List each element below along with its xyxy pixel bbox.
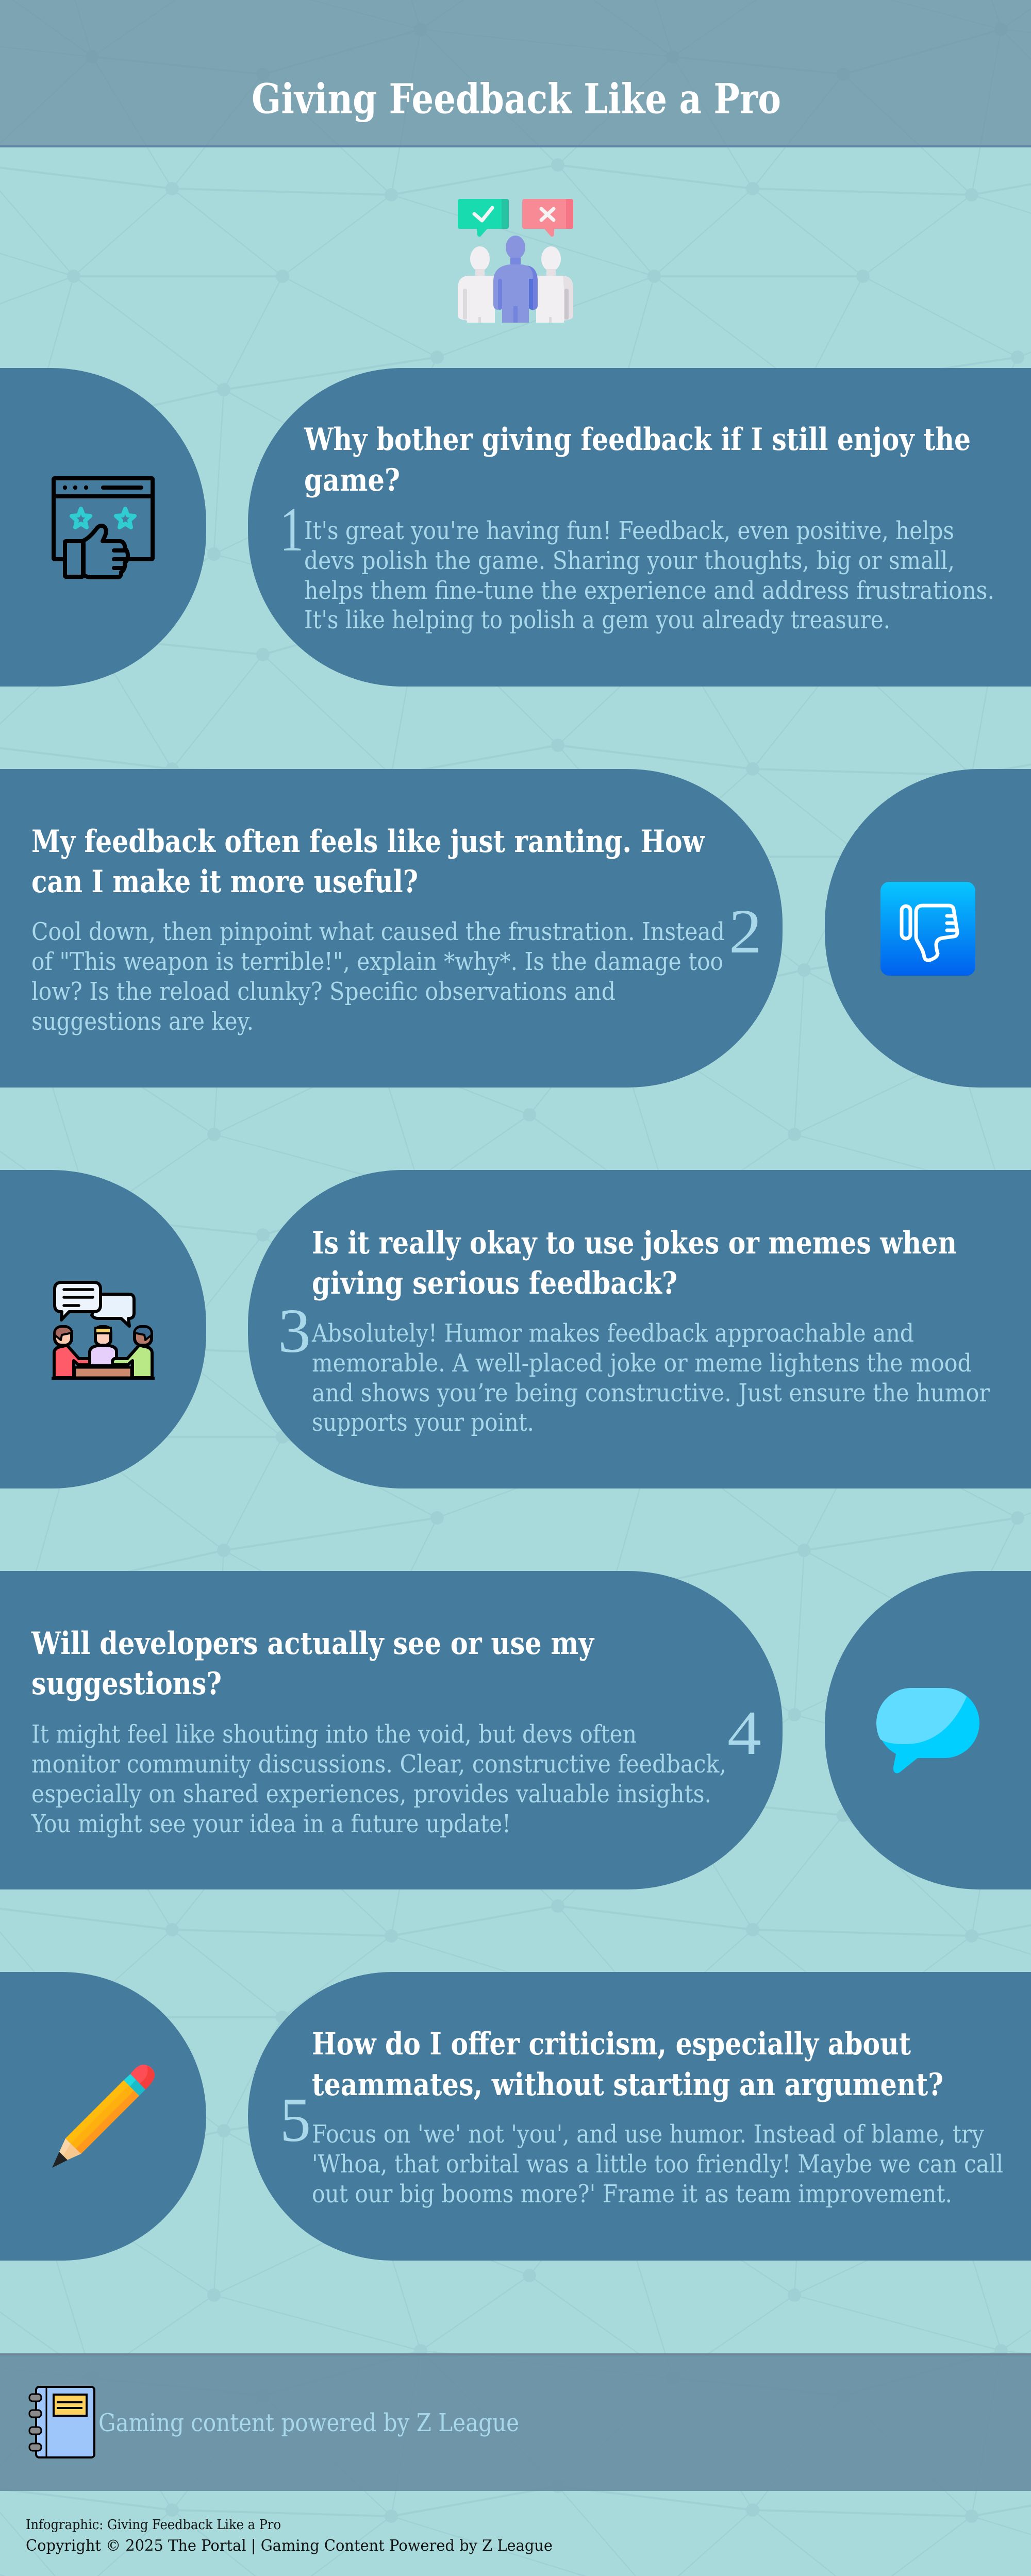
answer pill: question 5 [248,1972,1031,2261]
icon disc: question 5 [0,1972,206,2261]
body text: answer 2 [31,917,725,1036]
footer powered-by text: Gaming content powered by Z League [98,2408,519,2437]
footer band [0,2353,1031,2491]
panel: question 3 [0,1170,1031,1488]
caption: infographic name: Infographic: Giving Feedback Like a Pro [26,2517,281,2533]
heading: question 3: giving serious feedback? [312,1265,677,1301]
number 4: 4 [727,1698,761,1768]
body text: answer 1: It's like helping to polish a gem you already treasure. [304,606,890,634]
body text: answer 3: Absolutely! Humor makes feedback approachable and [311,1319,914,1348]
panel: question 4 [0,1571,1031,1889]
answer pill: question 2 [0,769,783,1088]
body text: answer 5 [312,2120,1003,2209]
heading: question 5 [312,2026,943,2103]
number 1: 1 [280,495,304,564]
icon disc: question 2 [825,769,1031,1088]
heading: question 2: can I make it more useful? [31,864,418,900]
number 3: 3 [278,1296,311,1366]
heading: question 1: game? [304,462,400,498]
body text: answer 4 [31,1720,726,1838]
panel: question 2 [0,769,1031,1088]
icon: spiral notebook [29,2387,94,2457]
panel: question 5 [0,1972,1031,2261]
body text: answer 4: especially on shared experiences, provides valuable insights. [31,1780,711,1809]
heading: question 5: How do I offer criticism, especially about [312,2026,911,2062]
body text: answer 2: low? Is the reload clunky? Specific observations and [31,977,616,1006]
heading: question 4: suggestions? [31,1666,222,1702]
heading: question 2: My feedback often feels like just ranting. How [31,824,705,860]
header band with title [0,0,1031,147]
icon: group of people with approve and reject speech bubbles [458,199,573,323]
body text: answer 5: out our big booms more?' Frame it as team improvement. [312,2180,952,2209]
body text: answer 4: monitor community discussions. Clear, constructive feedback, [31,1750,726,1779]
answer pill: question 4 [0,1571,783,1889]
body text: answer 2: of "This weapon is terrible!", explain *why*. Is the damage too [31,947,723,976]
panel: question 1 [0,368,1031,687]
number 5: 5 [280,2085,311,2155]
heading: question 4 [31,1626,595,1702]
icon: browser window with stars and thumbs up [54,478,153,577]
body text: answer 3: memorable. A well-placed joke or meme lightens the mood [312,1349,972,1378]
copyright line: Copyright © 2025 The Portal | Gaming Content Powered by Z League [26,2537,553,2555]
heading: question 4: Will developers actually see or use my [31,1626,595,1662]
body text: answer 2: suggestions are key. [31,1007,254,1036]
icon: pencil [52,2065,155,2168]
body text: answer 3: supports your point. [312,1408,534,1437]
body text: answer 1 [304,516,994,634]
icon disc: question 1 [0,368,206,687]
body text: answer 4: It might feel like shouting into the void, but devs often [31,1720,637,1749]
icon: thumbs down on blue tile [880,882,975,976]
body text: answer 3 [311,1319,990,1437]
heading: question 3 [312,1225,957,1301]
icon disc: question 4 [825,1571,1031,1889]
answer pill: question 1 [248,368,1031,687]
heading: question 1 [304,422,971,498]
heading: question 2 [31,824,705,900]
title: Giving Feedback Like a Pro [252,74,781,123]
icon: cyan speech bubble [876,1688,979,1774]
body text: answer 4: You might see your idea in a future update! [31,1810,511,1838]
number 2: 2 [729,897,762,966]
icon: three people talking at a table [52,1282,155,1378]
body text: answer 1: devs polish the game. Sharing your thoughts, big or small, [304,546,955,575]
body text: answer 1: It's great you're having fun! Feedback, even positive, helps [304,516,954,545]
answer pill: question 3 [248,1170,1031,1488]
body text: answer 2: Cool down, then pinpoint what caused the frustration. Instead [31,917,725,946]
icon disc: question 3 [0,1170,206,1488]
